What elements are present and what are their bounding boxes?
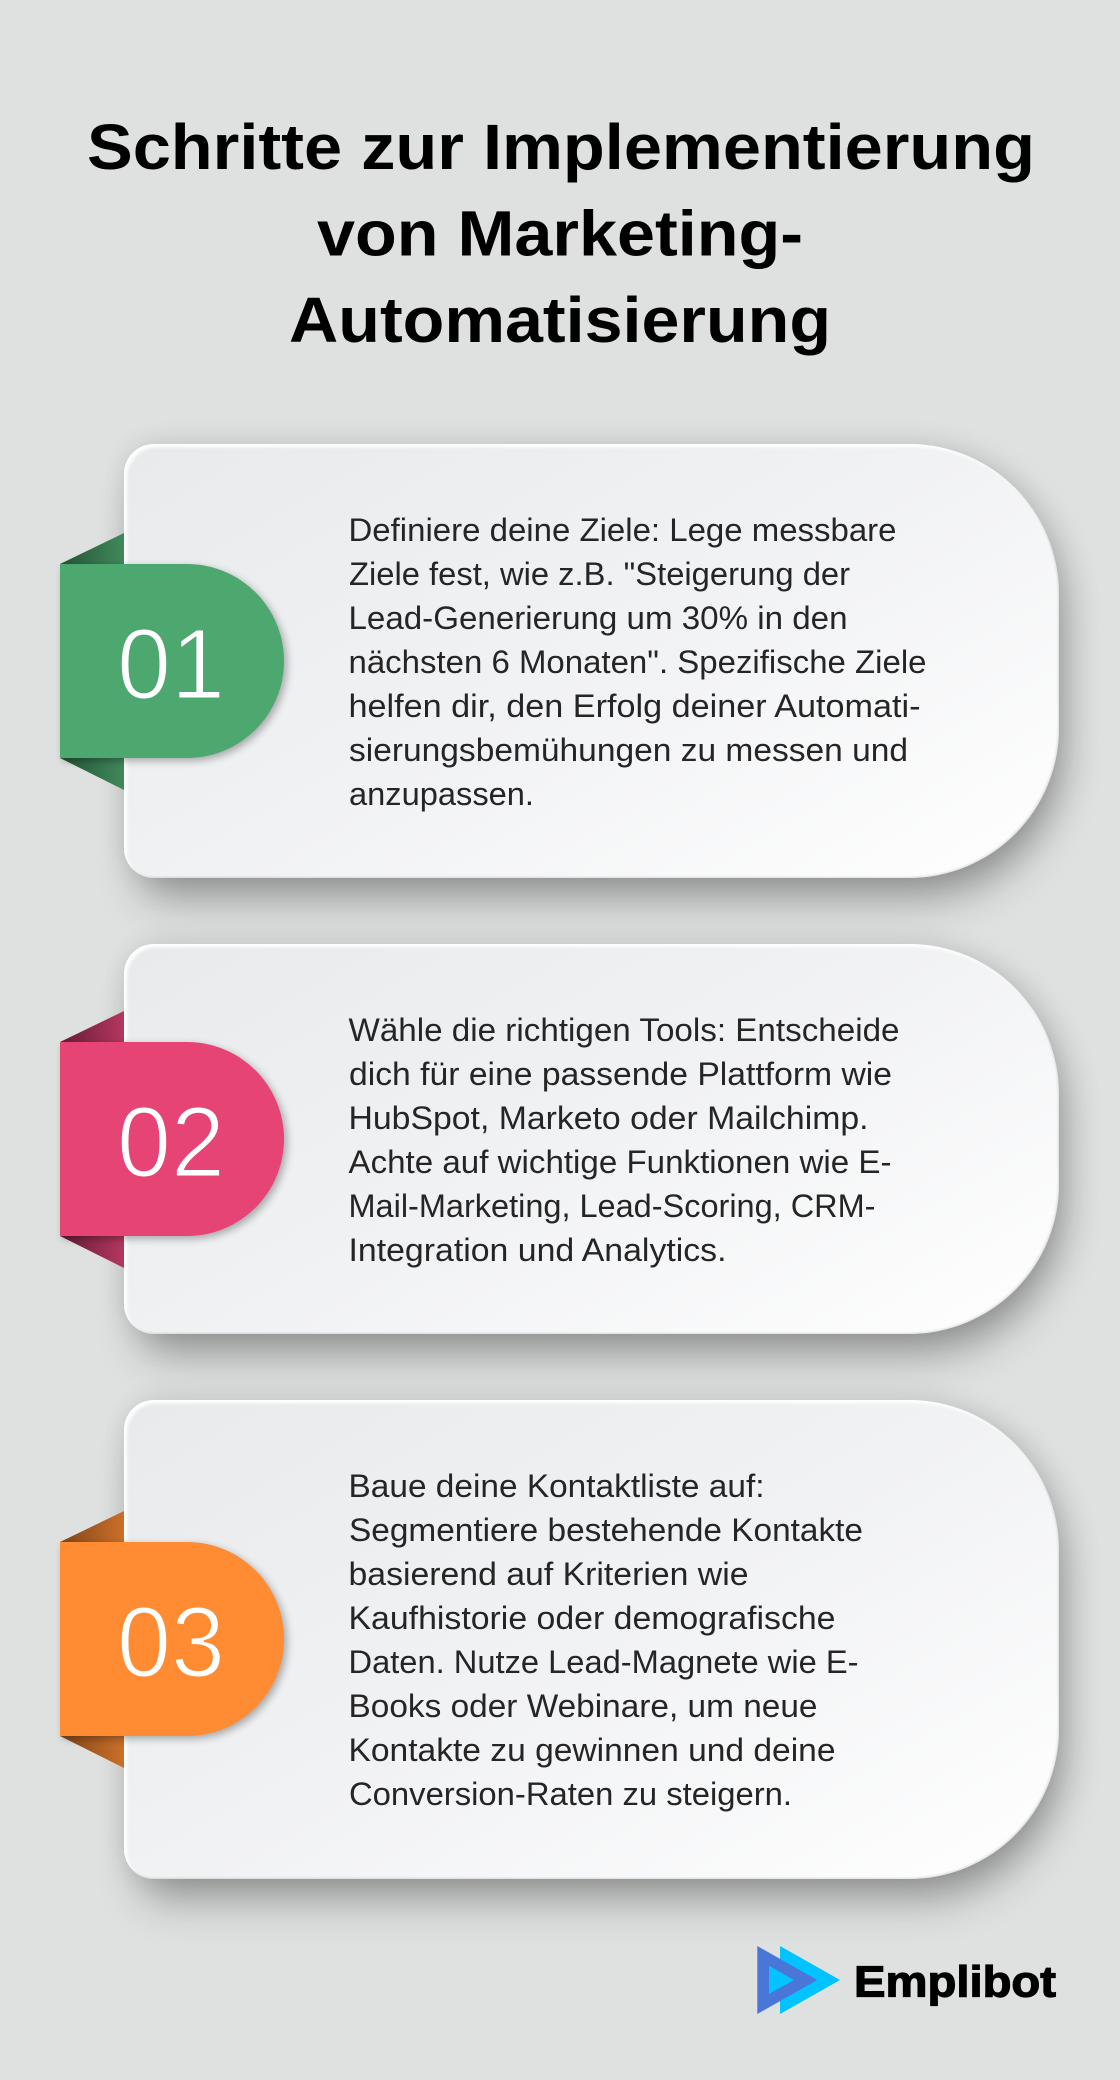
step 3 number: 03 [117, 1586, 225, 1698]
step 2 ribbon folds [60, 1011, 124, 1268]
step 2 text: Achte auf wichtige Funktionen wie E- [348, 1144, 892, 1180]
panel: step 1 [58, 434, 1088, 922]
step 3 text: Kaufhistorie oder demografische [348, 1600, 836, 1636]
step 3 number badge [60, 1542, 284, 1736]
step 2 text: Mail-Marketing, Lead-Scoring, CRM- [348, 1188, 876, 1224]
step 2 number badge [60, 1042, 284, 1236]
step 1 text: sierungsbemühungen zu messen und [349, 732, 908, 768]
step 1 number: 01 [117, 608, 225, 720]
step 2 text: HubSpot, Marketo oder Mailchimp. [348, 1100, 868, 1136]
step 1 text: Definiere deine Ziele: Lege messbare [348, 512, 896, 548]
step 3 text: Conversion-Raten zu steigern. [349, 1776, 792, 1812]
logo wordmark: Emplibot [854, 1958, 1056, 2006]
step 2 text: Wähle die richtigen Tools: Entscheide [348, 1012, 900, 1048]
step 1 card background [124, 444, 1059, 878]
step 2 text [348, 1012, 900, 1268]
step 1 text: nächsten 6 Monaten". Spezifische Ziele [348, 644, 927, 680]
step 3 text: Segmentiere bestehende Kontakte [349, 1512, 863, 1548]
panel: step 3 [58, 1390, 1088, 1924]
title: Schritte zur Implementierung [87, 111, 1035, 183]
step 3 card background [124, 1400, 1059, 1879]
icon: play triangles [757, 1946, 840, 2014]
step 1 number badge [60, 564, 284, 758]
step 2 card background [124, 944, 1059, 1334]
step 1 text: Ziele fest, wie z.B. "Steigerung der [349, 556, 850, 592]
step 3 text [348, 1468, 863, 1812]
step 2 text: Integration und Analytics. [348, 1232, 726, 1268]
step 3 text: Kontakte zu gewinnen und deine [348, 1732, 836, 1768]
step 1 ribbon folds [60, 533, 124, 790]
panel: step 2 [58, 934, 1088, 1378]
step 1 text: helfen dir, den Erfolg deiner Automati- [348, 688, 920, 724]
step 3 text: Daten. Nutze Lead-Magnete wie E- [348, 1644, 858, 1680]
step 3 text: Books oder Webinare, um neue [348, 1688, 818, 1724]
step 1 text [348, 512, 927, 812]
step 2 text: dich für eine passende Plattform wie [349, 1056, 892, 1092]
title [87, 111, 1035, 356]
step 3 text: basierend auf Kriterien wie [348, 1556, 748, 1592]
step 1 text: Lead-Generierung um 30% in den [348, 600, 848, 636]
step 2 number: 02 [117, 1086, 225, 1198]
title: von Marketing- [317, 198, 803, 270]
step 3 text: Baue deine Kontaktliste auf: [348, 1468, 764, 1504]
step 3 ribbon folds [60, 1511, 124, 1768]
step 1 text: anzupassen. [349, 776, 534, 812]
logo: Emplibot [757, 1946, 1056, 2014]
title: Automatisierung [289, 284, 831, 356]
